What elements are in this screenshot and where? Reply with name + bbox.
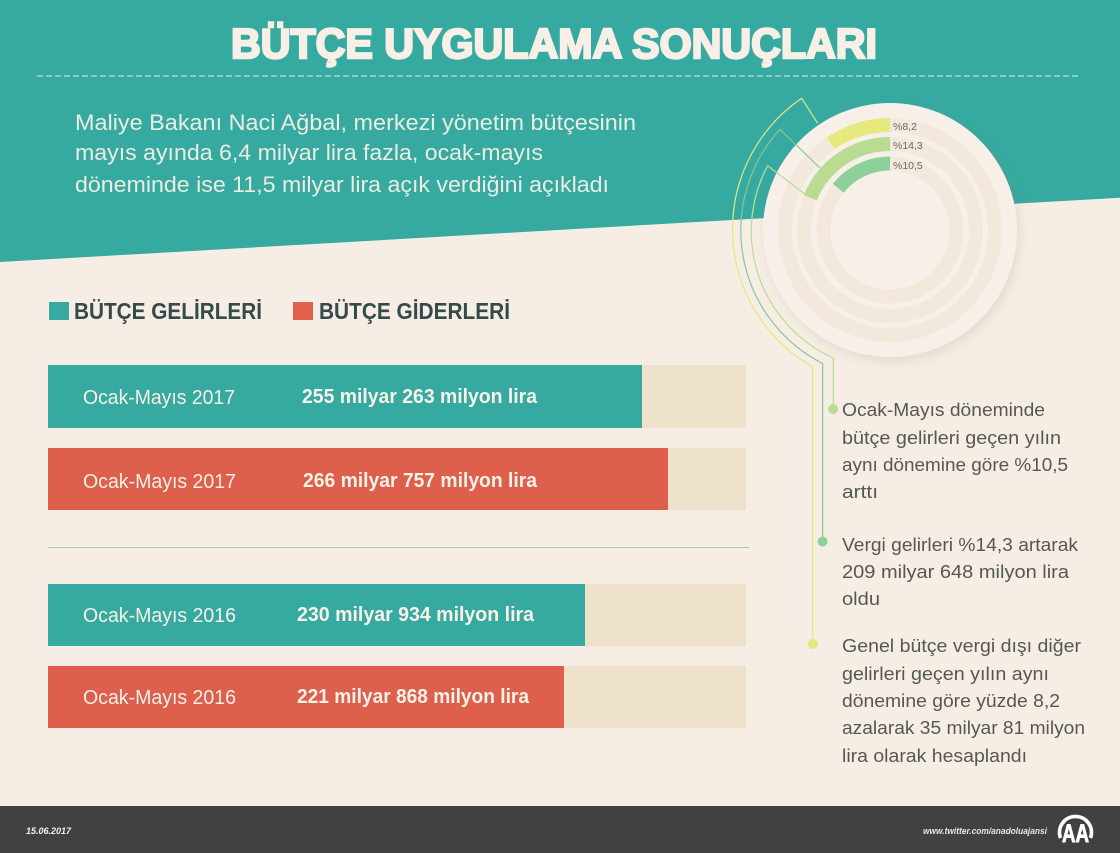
bar: gelirleri 2016: Ocak-Mayıs 2016 xyxy=(83,605,236,627)
note: gelirler: aynı dönemine göre %10,5 xyxy=(842,454,1068,475)
bar: giderleri 2017 xyxy=(48,448,746,510)
logo: AA: AA xyxy=(1062,820,1089,848)
dot: first note xyxy=(828,404,838,414)
bar: giderleri 2017: 266 milyar 757 milyon lira xyxy=(303,470,538,492)
note: vergi dışı xyxy=(842,635,1085,766)
radial chart xyxy=(763,103,1017,357)
note: vergi dışı: lira olarak hesaplandı xyxy=(842,745,1027,766)
note: vergi dışı: Genel bütçe vergi dışı diğer xyxy=(842,635,1081,656)
legend xyxy=(49,298,510,324)
bar: giderleri 2016: 221 milyar 868 milyon lira xyxy=(297,686,530,708)
note: vergi dışı: azalarak 35 milyar 81 milyon xyxy=(842,717,1085,738)
footer xyxy=(0,806,1120,853)
radial labels: %10,5 xyxy=(893,160,923,172)
leader line: yellow xyxy=(733,98,833,644)
note: vergi dışı: gelirleri geçen yılın aynı xyxy=(842,663,1049,684)
arc: 14,3 xyxy=(810,144,890,198)
bar: gelirleri 2016: 230 milyar 934 milyon lira xyxy=(297,604,535,626)
bar: gelirleri 2017 xyxy=(48,365,746,428)
date: 15.06.2017 xyxy=(26,826,72,836)
bar: gelirleri 2016 xyxy=(48,584,746,646)
bar: giderleri 2016: Ocak-Mayıs 2016 xyxy=(83,687,236,709)
arc: 10,5 xyxy=(838,164,890,188)
bar chart xyxy=(48,365,749,728)
legend: giderleri: BÜTÇE GİDERLERİ xyxy=(319,298,510,324)
note: vergi: Vergi gelirleri %14,3 artarak xyxy=(842,534,1079,555)
note: gelirler xyxy=(842,399,1068,502)
bar: gelirleri 2017: 255 milyar 263 milyon lira xyxy=(302,386,538,408)
leader line: light green xyxy=(751,166,833,409)
dot: second note xyxy=(818,536,828,546)
radial labels: %8,2 xyxy=(893,121,917,133)
dot: third note xyxy=(808,639,818,649)
leader line: mid green xyxy=(741,129,823,541)
bar: giderleri 2016 xyxy=(48,666,746,728)
arc: 8,2 xyxy=(831,125,890,143)
social handle: www.twitter.com/anadoluajansi xyxy=(923,826,1047,837)
note: vergi xyxy=(842,534,1079,609)
intro text xyxy=(75,110,636,197)
logo: AA xyxy=(1060,816,1092,848)
radial labels: %14,3 xyxy=(893,140,923,152)
radial labels xyxy=(893,121,923,172)
note: gelirler: bütçe gelirleri geçen yılın xyxy=(842,427,1061,448)
intro text: Maliye Bakanı Naci Ağbal, merkezi yönetim bütçesinin xyxy=(75,110,636,135)
bar: gelirleri 2017: Ocak-Mayıs 2017 xyxy=(83,387,235,409)
note: gelirler: arttı xyxy=(842,481,878,502)
note: vergi: oldu xyxy=(842,588,880,609)
teal header background xyxy=(0,0,1120,262)
legend: gelirleri: BÜTÇE GELİRLERİ xyxy=(74,298,262,324)
note: vergi: 209 milyar 648 milyon lira xyxy=(842,561,1070,582)
intro text: mayıs ayında 6,4 milyar lira fazla, ocak-mayıs xyxy=(75,140,543,165)
note: vergi dışı: dönemine göre yüzde 8,2 xyxy=(842,690,1060,711)
bar: giderleri 2017: Ocak-Mayıs 2017 xyxy=(83,471,236,493)
intro text: döneminde ise 11,5 milyar lira açık verdiğini açıkladı xyxy=(75,172,609,197)
title: BÜTÇE UYGULAMA SONUÇLARI xyxy=(231,20,877,67)
note: gelirler: Ocak-Mayıs döneminde xyxy=(842,399,1045,420)
